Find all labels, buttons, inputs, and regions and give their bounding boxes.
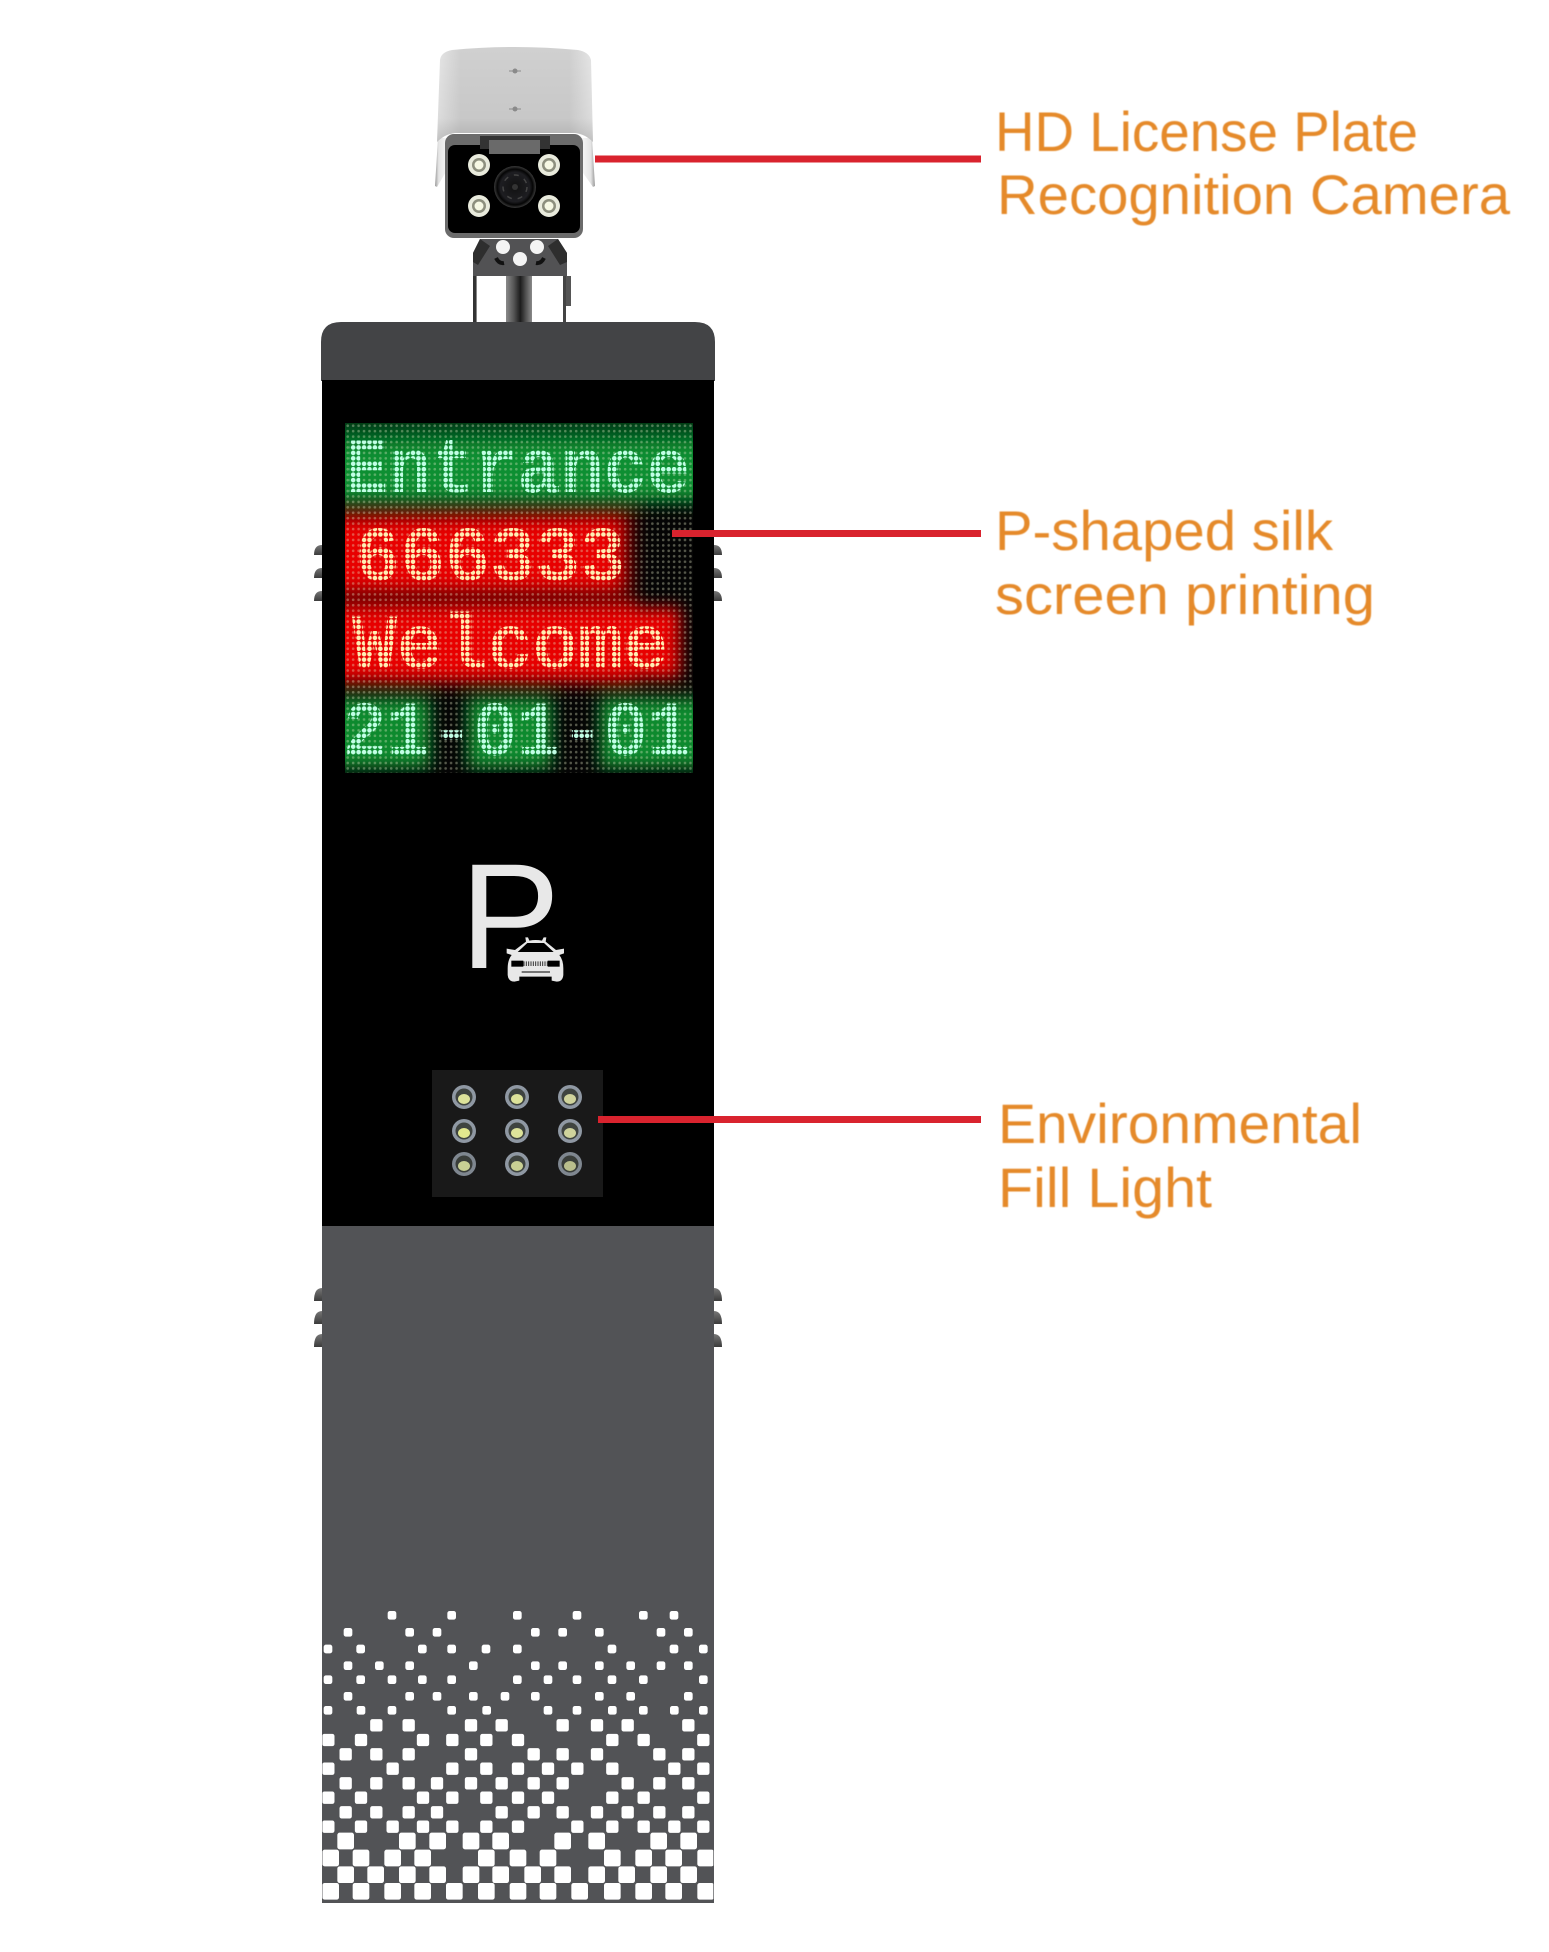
label: fill light: Fill Light xyxy=(998,1156,1212,1219)
hood screws xyxy=(509,68,521,112)
camera body xyxy=(445,134,583,238)
display text: Welcome xyxy=(352,604,668,692)
icon: car xyxy=(507,937,564,982)
dithered square pattern xyxy=(324,1613,712,1897)
LED display xyxy=(345,423,693,773)
terminal top cap xyxy=(321,322,715,381)
label: silk screen printing xyxy=(995,499,1375,626)
display dot grid xyxy=(345,423,693,773)
small squares xyxy=(326,1613,705,1712)
hood side flaps xyxy=(435,138,447,187)
label: fill light xyxy=(998,1092,1362,1219)
label: silk screen printing: screen printing xyxy=(995,563,1375,626)
camera mount bracket xyxy=(473,239,571,322)
callout line: display xyxy=(672,530,981,537)
fill light LEDs xyxy=(452,1085,582,1176)
label: camera xyxy=(995,100,1511,226)
label: silk screen printing: P-shaped silk xyxy=(995,499,1334,562)
terminal black face xyxy=(322,380,714,1226)
label: fill light: Environmental xyxy=(998,1092,1362,1155)
display text: 21-01-01 xyxy=(343,691,691,779)
label: camera: HD License Plate xyxy=(995,100,1418,163)
display text: Entrance xyxy=(345,428,690,516)
camera lens xyxy=(494,166,536,208)
parking P symbol: P xyxy=(460,832,560,1000)
camera hood xyxy=(437,47,593,142)
display text: 666333 xyxy=(355,516,625,604)
callout line: fill light xyxy=(598,1116,981,1123)
large squares xyxy=(325,1835,712,1897)
medium squares xyxy=(324,1721,707,1831)
callout line: camera xyxy=(595,156,981,162)
side mounting clips xyxy=(314,545,722,1347)
display colour bands xyxy=(345,423,693,773)
camera LEDs xyxy=(468,154,560,217)
fill light panel xyxy=(432,1070,603,1197)
display text xyxy=(347,440,688,756)
camera xyxy=(435,47,595,238)
hood shading xyxy=(437,47,593,142)
label: camera: Recognition Camera xyxy=(997,163,1511,226)
terminal lower panel xyxy=(322,1226,714,1903)
